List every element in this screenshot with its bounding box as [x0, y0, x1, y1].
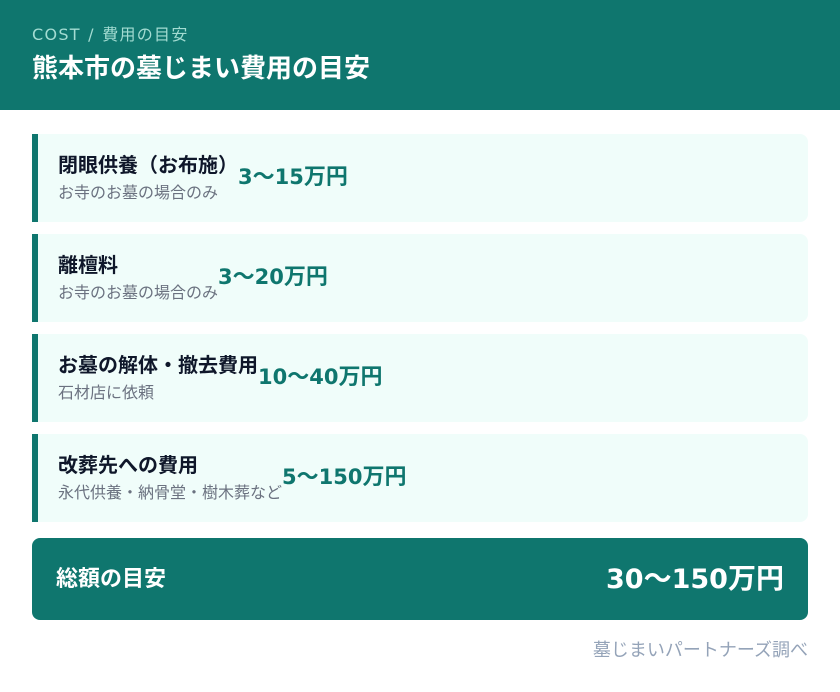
item amount: 3〜15万円 — [238, 159, 348, 191]
item text — [58, 149, 238, 203]
source note: 墓じまいパートナーズ調べ — [593, 636, 808, 662]
item amount: 10〜40万円 — [258, 359, 382, 391]
item text — [58, 449, 282, 503]
header banner — [0, 0, 840, 110]
item amount: 5〜150万円 — [282, 459, 407, 491]
item text: 閉眼供養（お布施） — [58, 149, 238, 178]
item text: お寺のお墓の場合のみ — [58, 179, 218, 203]
item text — [58, 249, 218, 303]
item text: お寺のお墓の場合のみ — [58, 279, 218, 303]
item text: 永代供養・納骨堂・樹木葬など — [58, 479, 282, 503]
panel: memorial service cost — [32, 134, 808, 222]
eyebrow label: COST / 費用の目安 — [32, 21, 189, 45]
item amount: 3〜20万円 — [218, 259, 328, 291]
item text: 離檀料 — [58, 249, 118, 278]
total amount: 30〜150万円 — [606, 556, 784, 596]
item text — [58, 349, 258, 403]
item text: 改葬先への費用 — [58, 449, 198, 478]
panel: temple departure fee — [32, 234, 808, 322]
panel: total estimate — [32, 538, 808, 620]
total label: 総額の目安 — [56, 561, 166, 593]
item text: お墓の解体・撤去費用 — [58, 349, 258, 378]
item text: 石材店に依頼 — [58, 379, 154, 403]
panel: reburial cost — [32, 434, 808, 522]
title: 熊本市の墓じまい費用の目安 — [32, 48, 370, 85]
panel: demolition cost — [32, 334, 808, 422]
